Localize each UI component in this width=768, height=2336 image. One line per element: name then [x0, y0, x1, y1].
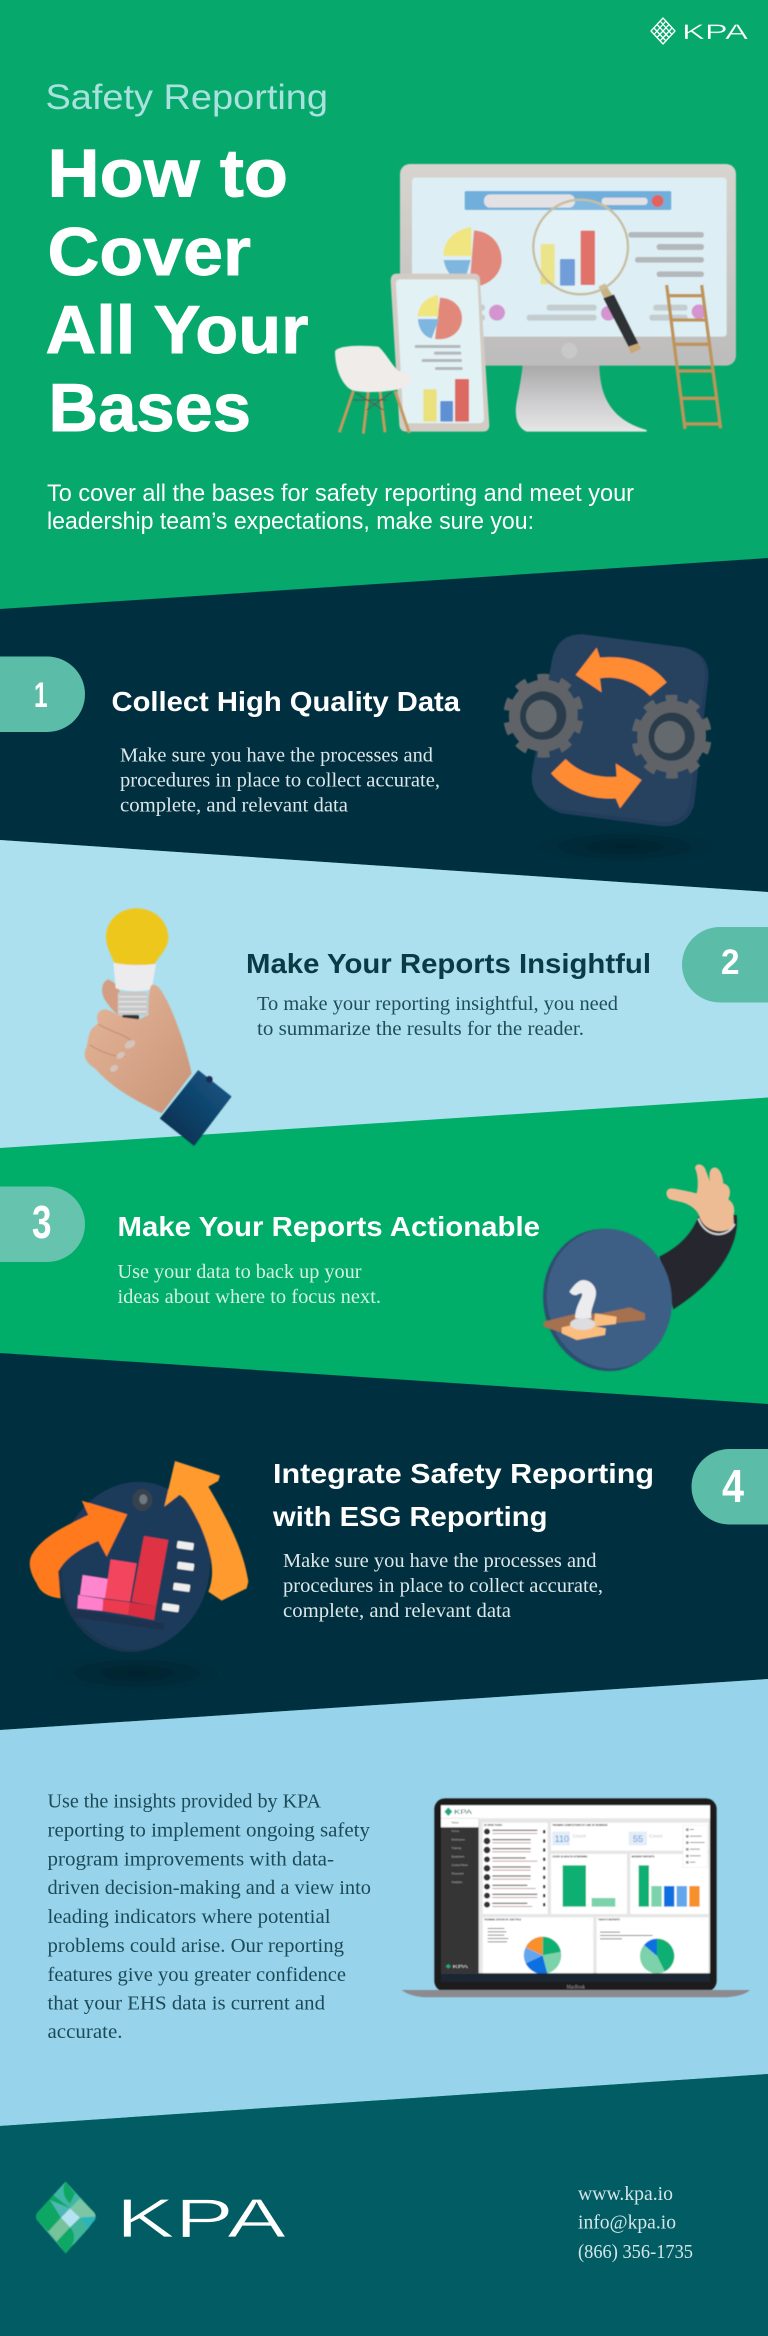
- body text: complete, and relevant data: [283, 1601, 511, 1622]
- number pill 4: [692, 1449, 768, 1524]
- icon: gears and orange cycle arrows: [503, 634, 715, 864]
- illustration: monitor, tablet, chair and ladder: [335, 164, 736, 434]
- body text: To make your reporting insightful, you need: [257, 994, 618, 1015]
- body text: [120, 746, 440, 816]
- dashboard logo: KPA: [454, 1809, 473, 1816]
- body text: Use your data to back up your: [118, 1262, 362, 1283]
- title: Bases: [48, 370, 251, 446]
- right gear: [632, 695, 712, 778]
- dashboard sidebar menu: Training: [452, 1846, 462, 1850]
- summary text: problems could arise. Our reporting: [48, 1935, 344, 1957]
- laptop body: [402, 1798, 750, 1997]
- laptop body: MacBook: [567, 1985, 586, 1990]
- dashboard context menu: [683, 1825, 708, 1867]
- body text: Make sure you have the processes and: [283, 1551, 597, 1572]
- contact details: info@kpa.io: [578, 2212, 676, 2234]
- summary text: Use the insights provided by KPA: [48, 1790, 321, 1812]
- panel: hero: [0, 0, 768, 609]
- intro text: [47, 480, 634, 535]
- dashboard panel: training status pie chart: [483, 1917, 593, 1974]
- left gear: [503, 674, 583, 757]
- dashboard panel: open tasks: 25 OPEN TASKS: [484, 1824, 503, 1827]
- heading: with ESG Reporting: [272, 1501, 548, 1532]
- panel: step 4 integrate safety reporting with ESG reporting: [0, 1353, 768, 1730]
- number pill 3: 3: [32, 1196, 52, 1248]
- number pill 1: 1: [34, 676, 48, 715]
- number pill 1: [0, 656, 85, 732]
- panel: step 1 collect high quality data: [0, 558, 768, 892]
- dashboard panel: open tasks: [483, 1823, 548, 1914]
- dashboard panel: incident reports bar chart: [630, 1854, 708, 1914]
- logo: KPA top right: [651, 18, 748, 44]
- monitor screen: [412, 178, 727, 359]
- dashboard logo: [444, 1807, 473, 1816]
- logo: KPA top right: KPA: [682, 21, 748, 44]
- chair: [335, 346, 411, 434]
- summary text: program improvements with data-: [48, 1848, 334, 1870]
- contact details: www.kpa.io: [578, 2183, 673, 2205]
- icon: bar chart disc with growth arrows: [30, 1461, 248, 1692]
- summary text: reporting to implement ongoing safety: [48, 1820, 371, 1842]
- dashboard panel: training completions: TRAINING COMPLETIONS BY LINE OF BUSINESS: [552, 1824, 608, 1827]
- title: All Your: [46, 292, 308, 368]
- dashboard panel: training completions: 55: [633, 1834, 643, 1844]
- dashboard panel: today's reports pie chart: [597, 1917, 708, 1974]
- dashboard sidebar menu: Control Panel: [452, 1863, 468, 1867]
- dashboard sidebar menu: [446, 1821, 468, 1969]
- intro text: To cover all the bases for safety reporting and meet your: [47, 480, 634, 507]
- monitor stand: [516, 365, 647, 432]
- body text: Make sure you have the processes and: [120, 746, 433, 766]
- dashboard panel: training status pie chart: TRAINING STATUS BY JOB TITLE: [484, 1919, 522, 1922]
- dashboard panel: incident reports bar chart: INCIDENT REPORTS: [632, 1856, 655, 1858]
- contact details: [578, 2183, 693, 2263]
- summary text: accurate.: [48, 2021, 122, 2043]
- body text: [283, 1551, 603, 1622]
- title: [46, 136, 308, 446]
- panel: step 2 make your reports insightful: [0, 840, 768, 1148]
- panel: step 3 make your reports actionable: [0, 1098, 768, 1404]
- number pill 2: [682, 927, 768, 1002]
- dashboard panel: training completions: [551, 1823, 708, 1851]
- summary text: features give you greater confidence: [48, 1964, 346, 1986]
- body text: procedures in place to collect accurate,: [283, 1576, 603, 1597]
- eyebrow: Safety Reporting: Safety Reporting: [46, 78, 328, 117]
- laptop with KPA dashboard: [402, 1798, 750, 1997]
- icon: hand, disc and chess knight: [532, 1164, 737, 1381]
- dashboard panel: covid health screening bar chart: COVID-19 HEALTH SCREENING: [552, 1855, 588, 1858]
- magnifying glass: [533, 200, 641, 354]
- dashboard panel: today's reports pie chart: TODAY'S REPORTS: [598, 1919, 620, 1922]
- dashboard sidebar menu: KPA: [453, 1964, 468, 1969]
- body text: [118, 1262, 381, 1308]
- tablet: [391, 274, 489, 432]
- heading: Integrate Safety Reporting: [273, 1458, 654, 1489]
- panel: footer: [0, 2074, 768, 2336]
- dashboard panel: training completions: 110: [555, 1834, 569, 1844]
- ladder: [667, 285, 721, 429]
- dashboard sidebar menu: Employees: [452, 1838, 465, 1842]
- dashboard sidebar menu: Home: [452, 1821, 459, 1825]
- heading: Make Your Reports Actionable: [118, 1211, 540, 1242]
- contact details: (866) 356-1735: [578, 2241, 693, 2263]
- heading: Collect High Quality Data: [112, 686, 460, 717]
- summary text: that your EHS data is current and: [48, 1992, 325, 2014]
- dashboard sidebar menu: Equipment: [452, 1855, 465, 1859]
- monitor body: [400, 164, 736, 366]
- panel: closing summary: [0, 1679, 768, 2126]
- dashboard sidebar menu: Analytics: [452, 1880, 463, 1884]
- dashboard panel: training completions: Count: [572, 1834, 586, 1840]
- heading: Make Your Reports Insightful: [246, 948, 651, 979]
- icon: hand holding light bulb: [85, 908, 231, 1145]
- intro text: leadership team’s expectations, make sure you:: [47, 508, 534, 535]
- dashboard panel: covid health screening bar chart: [551, 1854, 627, 1914]
- title: How to: [48, 136, 288, 212]
- logo: KPA footer: [36, 2182, 286, 2253]
- body text: ideas about where to focus next.: [118, 1287, 381, 1308]
- logo: KPA footer: KPA: [116, 2187, 286, 2249]
- summary text: leading indicators where potential: [48, 1906, 331, 1928]
- body text: complete, and relevant data: [120, 796, 348, 816]
- heading: [272, 1458, 654, 1532]
- summary text: driven decision-making and a view into: [48, 1877, 371, 1899]
- dashboard panel: training completions: Count: [649, 1834, 663, 1840]
- body text: procedures in place to collect accurate,: [120, 770, 440, 792]
- dashboard sidebar menu: Personnel: [452, 1872, 464, 1876]
- title: Cover: [48, 214, 251, 290]
- body text: [257, 994, 618, 1040]
- number pill 4: 4: [722, 1460, 744, 1512]
- number pill 2: 2: [721, 943, 740, 982]
- number pill 3: [0, 1186, 85, 1262]
- dashboard sidebar menu: Forms: [452, 1829, 460, 1833]
- summary text: [48, 1790, 371, 2043]
- body text: to summarize the results for the reader.: [257, 1019, 584, 1040]
